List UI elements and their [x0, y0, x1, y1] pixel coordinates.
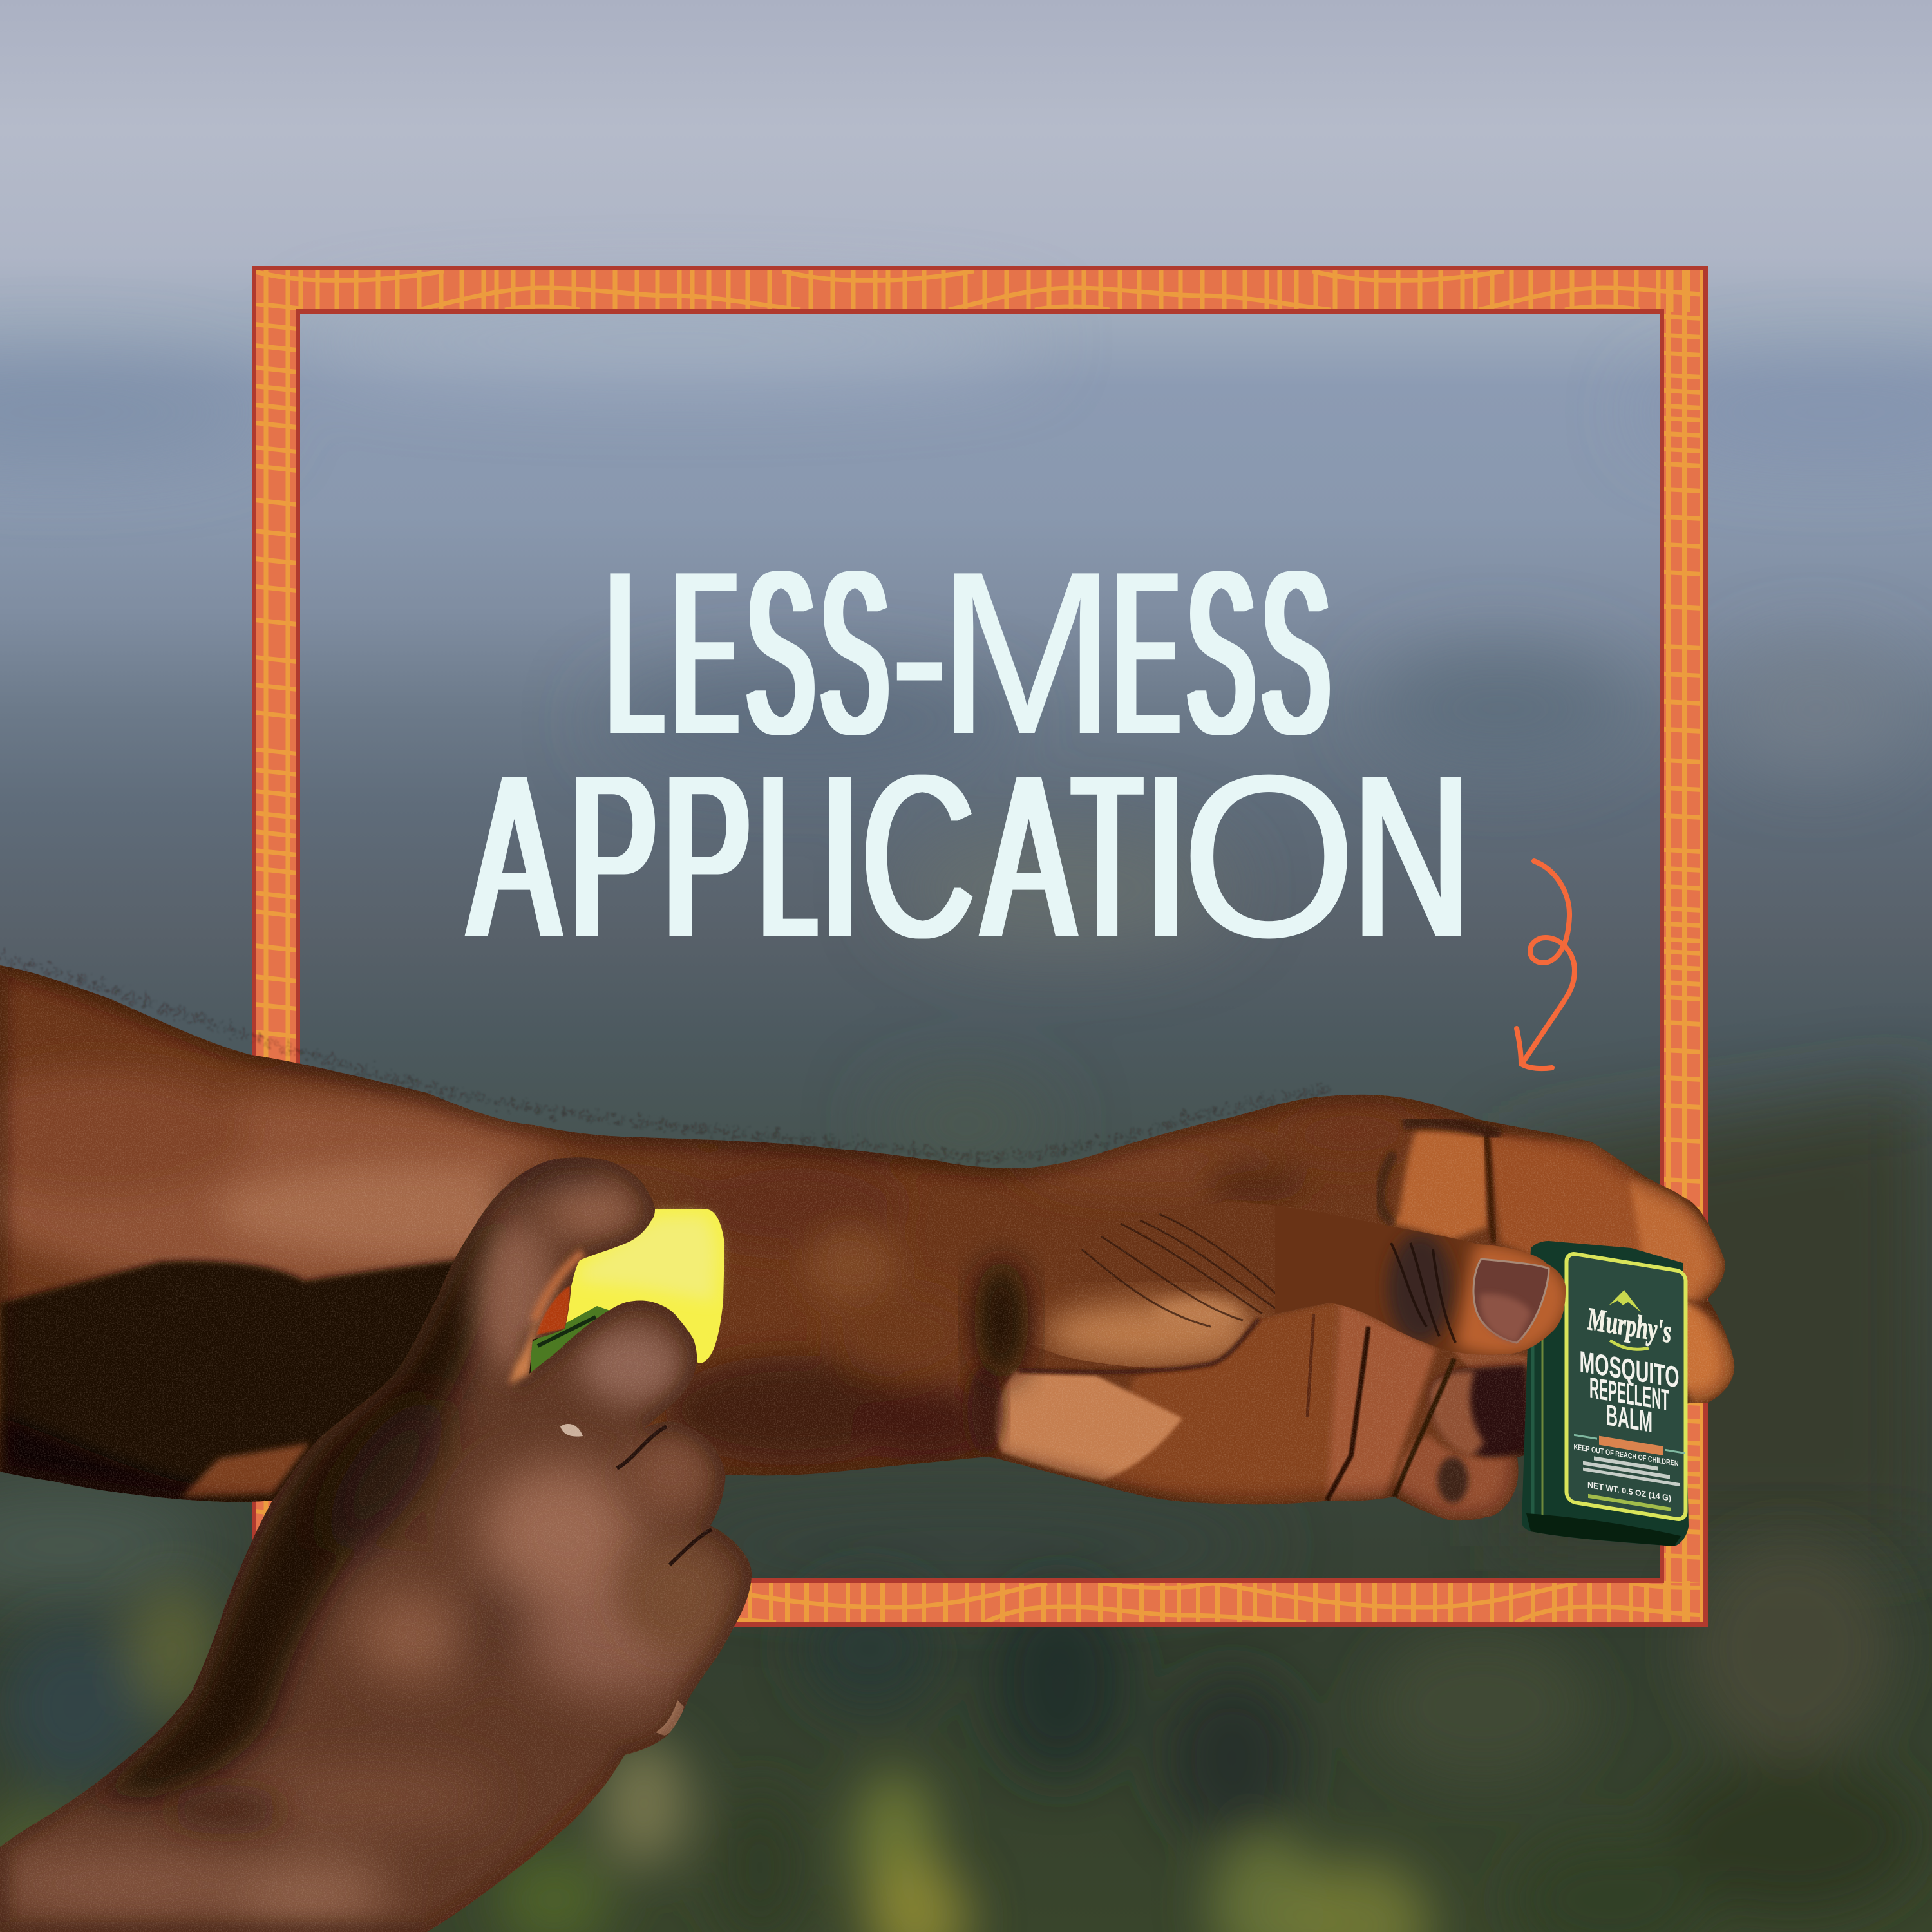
- rim shading along fingers: [0, 1157, 752, 1932]
- warning and net weight text: [1574, 1442, 1680, 1504]
- yellow repellent stick applicator: [530, 1209, 724, 1378]
- green applicator base: [530, 1306, 612, 1378]
- title: LESS-MESS APPLICATION: [464, 571, 1461, 939]
- title: LESS-MESS APPLICATION: L: [761, 727, 816, 986]
- title: LESS-MESS APPLICATION: N: [1352, 727, 1471, 986]
- title: LESS-MESS APPLICATION: A: [983, 727, 1075, 986]
- warning and net weight text: KEEP OUT OF REACH OF CHILDREN: [1573, 1442, 1678, 1468]
- title: LESS-MESS APPLICATION: S: [821, 524, 888, 782]
- product: Murphy's Mosquito Repellent Balm stick: [1522, 1241, 1689, 1546]
- title: LESS-MESS APPLICATION: P: [664, 727, 750, 986]
- product name: BALM: [1606, 1398, 1653, 1439]
- title: LESS-MESS APPLICATION: O: [1180, 727, 1358, 986]
- skin grain: [0, 934, 1771, 1546]
- title: LESS-MESS APPLICATION: T: [1073, 727, 1141, 986]
- title: LESS-MESS APPLICATION: S: [1262, 524, 1329, 782]
- title: LESS-MESS APPLICATION: M: [937, 524, 1116, 782]
- palm, lit patch: [995, 1372, 1182, 1481]
- lit sliver under forearm: [182, 1443, 310, 1497]
- title: LESS-MESS APPLICATION: S: [747, 524, 814, 782]
- front hand applying the stick: [0, 1146, 773, 1932]
- fingers at balm edge: [1629, 1179, 1725, 1301]
- shaded side of hand: [90, 1211, 515, 1797]
- sunlit red edge of wrist: [427, 1736, 667, 1932]
- brand name: Murphy's: [1587, 1300, 1671, 1350]
- knuckle wrinkles: [1391, 1243, 1455, 1343]
- arm and back hand holding balm: [0, 927, 1771, 1546]
- title: LESS-MESS APPLICATION: P: [571, 727, 657, 986]
- title: LESS-MESS APPLICATION: E: [1114, 524, 1179, 782]
- title: LESS-MESS APPLICATION: I: [1149, 727, 1183, 986]
- upper fingers, lit: [1385, 1130, 1488, 1240]
- warning and net weight text: NET WT. 0.5 OZ (14 G): [1587, 1480, 1671, 1503]
- fingers: [580, 1327, 683, 1404]
- title: LESS-MESS APPLICATION: S: [1188, 524, 1255, 782]
- title: LESS-MESS APPLICATION: -: [896, 524, 943, 782]
- balm body: [1522, 1241, 1689, 1546]
- lit back of hand: [0, 1381, 696, 1929]
- balm label: [1566, 1253, 1686, 1520]
- product name: REPELLENT: [1589, 1370, 1669, 1417]
- title: LESS-MESS APPLICATION: A: [469, 727, 560, 986]
- logo mountain: [1609, 1287, 1641, 1312]
- shadow cast on forearm: [0, 1256, 580, 1507]
- palm, shaded middle: [1103, 1301, 1340, 1507]
- thumb inner, red glow: [536, 1286, 570, 1335]
- title: LESS-MESS APPLICATION: L: [607, 524, 663, 782]
- title: LESS-MESS APPLICATION: I: [823, 727, 857, 986]
- thumbnail: [1473, 1259, 1549, 1343]
- product name: MOSQUITO: [1579, 1345, 1679, 1394]
- decorative orange plaid frame: [252, 266, 1708, 1627]
- title: LESS-MESS APPLICATION: E: [673, 524, 737, 782]
- arrow: hand-drawn loop pointing to product: [1517, 861, 1575, 1068]
- thenar wrinkles: [1082, 1214, 1291, 1327]
- thenar pad of hand: [966, 1191, 1352, 1378]
- thumb over balm: [1262, 1191, 1578, 1372]
- wrist hair fringe: [0, 957, 1330, 1157]
- product name: [1579, 1345, 1680, 1443]
- title: LESS-MESS APPLICATION: C: [861, 727, 976, 986]
- rim shading along silhouette: [0, 965, 1734, 1520]
- thumb: [477, 1217, 554, 1372]
